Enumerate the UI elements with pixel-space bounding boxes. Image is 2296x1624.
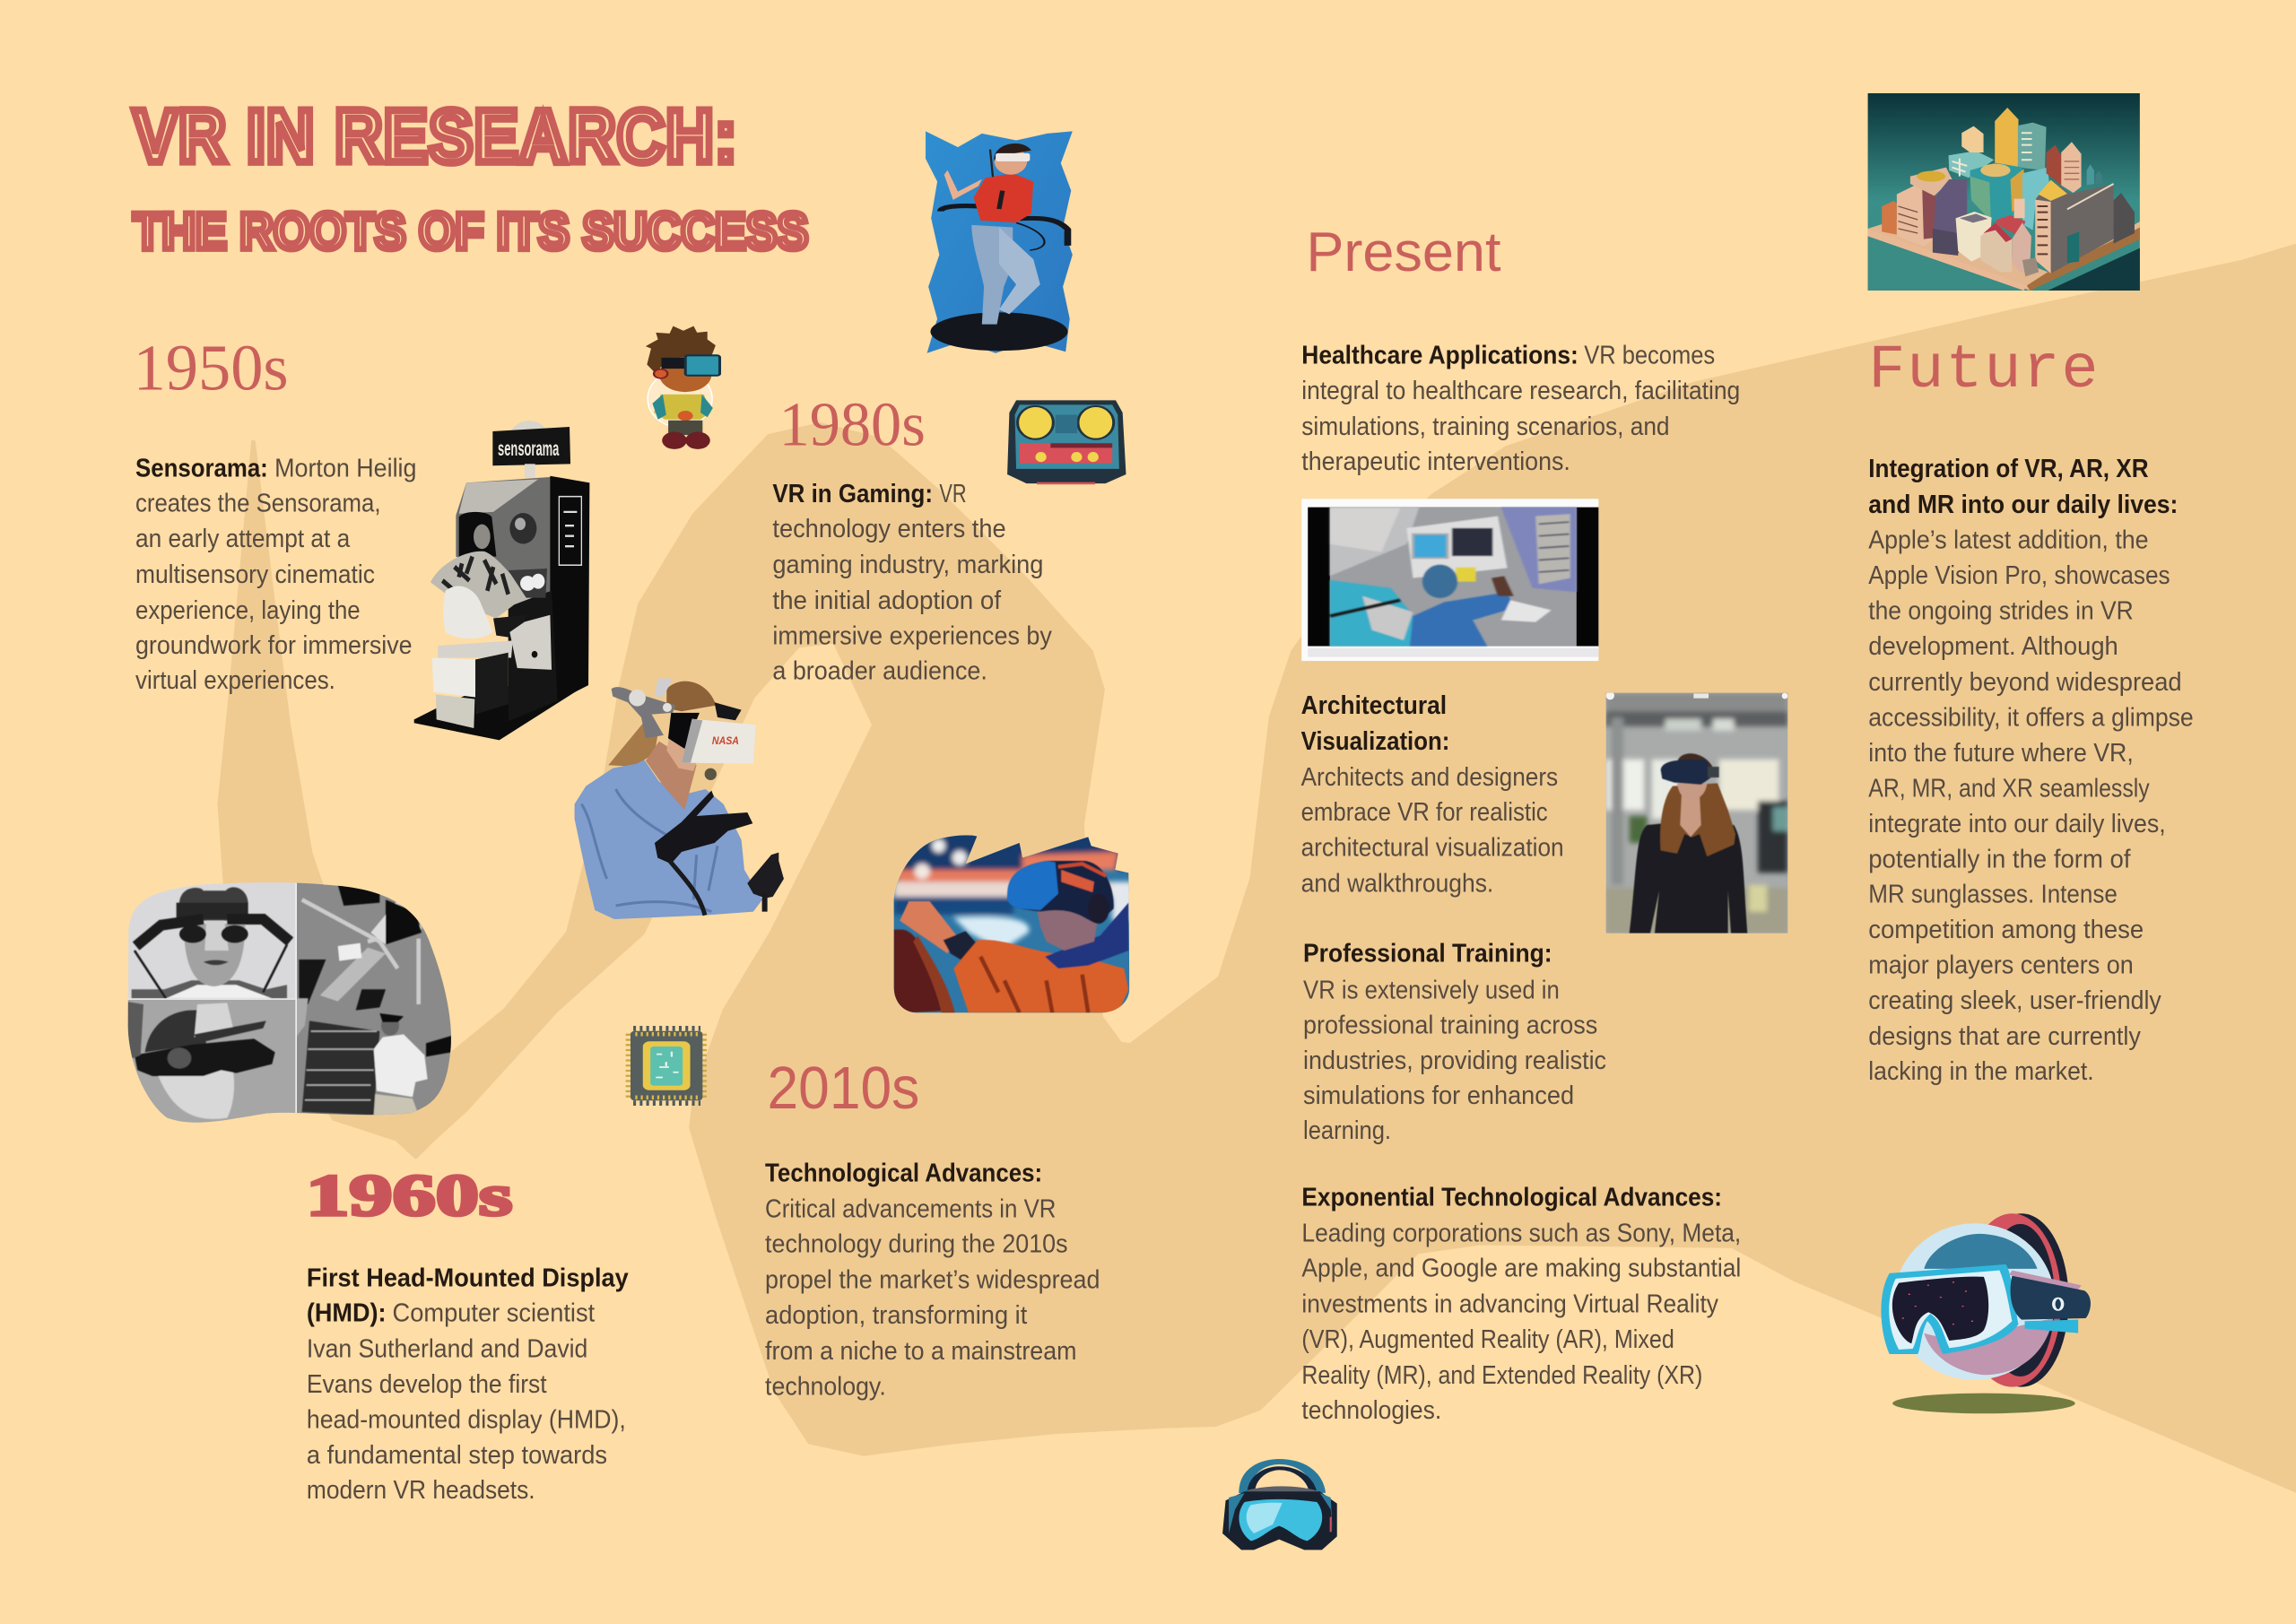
text: first HMD: Ivan Sutherland and David bbox=[307, 1334, 587, 1363]
text: Sensorama: experience, laying the bbox=[135, 596, 361, 625]
text: exponential advances: Reality (MR), and Extended Reality (XR) bbox=[1301, 1361, 1702, 1390]
text: technological advances bbox=[765, 1159, 1100, 1401]
illustration: isometric city bbox=[1868, 93, 2141, 291]
text: future integration: lacking in the market. bbox=[1868, 1057, 2094, 1086]
text: technological advances: technology during the 2010s bbox=[765, 1230, 1068, 1259]
text: technological advances: Critical advancements in VR bbox=[765, 1195, 1056, 1224]
icon: small VR goggles bbox=[1222, 1462, 1337, 1550]
text: first HMD: (HMD): bbox=[307, 1298, 387, 1327]
text: first HMD: First Head-Mounted Display bbox=[307, 1264, 629, 1292]
text: first HMD: Evans develop the first bbox=[307, 1370, 547, 1399]
text: future integration: creating sleek, user-friendly bbox=[1868, 986, 2162, 1015]
text: future integration bbox=[1868, 455, 2194, 1086]
photo: woman in VR headset in office bbox=[1606, 691, 1787, 934]
title: VR IN RESEARCH: bbox=[134, 94, 738, 178]
text: exponential advances: (VR), Augmented Reality (AR), Mixed bbox=[1301, 1325, 1674, 1354]
text: professional training bbox=[1303, 940, 1606, 1145]
text: future integration: into the future where VR, bbox=[1868, 739, 2134, 768]
text: architectural visualization: and walkthroughs. bbox=[1301, 869, 1493, 898]
text: Sensorama: virtual experiences. bbox=[135, 666, 335, 695]
text: exponential advances: investments in advancing Virtual Reality bbox=[1301, 1290, 1719, 1319]
text: future integration: and MR into our daily lives: bbox=[1868, 491, 2178, 519]
text: exponential advances: Exponential Technological Advances: bbox=[1301, 1183, 1722, 1211]
text: VR in Gaming bbox=[772, 480, 1053, 686]
heading: 1960s: 1960s bbox=[306, 1164, 512, 1229]
text: first HMD: Computer scientist bbox=[393, 1298, 595, 1327]
text: future integration: currently beyond widespread bbox=[1868, 668, 2182, 697]
text: professional training: learning. bbox=[1303, 1116, 1391, 1145]
text: future integration: MR sunglasses. Intense bbox=[1868, 881, 2118, 909]
heading: 1950s: 1950s bbox=[134, 331, 289, 404]
text: exponential advances: Leading corporations such as Sony, Meta, bbox=[1301, 1219, 1741, 1247]
icon: retro game console bbox=[1007, 400, 1126, 484]
text: future integration: Integration of VR, AR, XR bbox=[1868, 455, 2149, 483]
text: Sensorama: an early attempt at a bbox=[135, 525, 350, 553]
text: VR in Gaming: technology enters the bbox=[772, 515, 1006, 543]
icon: large VR headset illustration bbox=[1881, 1213, 2091, 1413]
text: future integration: Apple Vision Pro, showcases bbox=[1868, 561, 2170, 590]
text: technological advances: adoption, transforming it bbox=[765, 1301, 1027, 1330]
heading: Present: Present bbox=[1306, 221, 1500, 283]
text: future integration: competition among these bbox=[1868, 916, 2144, 944]
text: healthcare: VR becomes bbox=[1584, 342, 1715, 370]
text: healthcare: therapeutic interventions. bbox=[1301, 447, 1570, 476]
photo: woman in NASA headset bbox=[575, 679, 784, 919]
photo: racer in VR headset bbox=[891, 831, 1133, 1016]
title bbox=[134, 94, 808, 261]
text: future integration: major players centers on bbox=[1868, 951, 2134, 980]
text: healthcare: integral to healthcare research, facilitating bbox=[1301, 377, 1740, 405]
text: Sensorama: groundwork for immersive bbox=[135, 631, 413, 660]
text: first HMD: a fundamental step towards bbox=[307, 1441, 607, 1470]
text: VR in Gaming: gaming industry, marking bbox=[772, 551, 1043, 579]
text: first HMD: modern VR headsets. bbox=[307, 1476, 535, 1505]
text: professional training: professional training across bbox=[1303, 1012, 1597, 1040]
text: professional training: industries, providing realistic bbox=[1303, 1046, 1606, 1075]
background VR brush shape bbox=[220, 246, 2296, 1490]
text: future integration: integrate into our daily lives, bbox=[1868, 810, 2166, 838]
text: architectural visualization: Architectural bbox=[1301, 691, 1447, 720]
text: VR in Gaming: the initial adoption of bbox=[772, 586, 1001, 615]
text: VR in Gaming: VR bbox=[939, 480, 967, 508]
text: healthcare bbox=[1301, 342, 1740, 476]
icon: microchip bbox=[629, 1029, 704, 1103]
text: Sensorama: Morton Heilig bbox=[274, 454, 416, 482]
text: first HMD: head-mounted display (HMD), bbox=[307, 1406, 626, 1435]
photo: person on VR pod with red shirt bbox=[926, 131, 1073, 353]
heading: 1980s: 1980s bbox=[779, 389, 926, 459]
text: future integration: potentially in the form of bbox=[1868, 845, 2131, 873]
photo: Sensorama machine bbox=[414, 421, 589, 740]
text: future integration: Apple’s latest addition, the bbox=[1868, 525, 2149, 554]
text: VR in Gaming: VR in Gaming: bbox=[772, 480, 933, 508]
photo: Sutherland head-mounted display collage bbox=[126, 879, 455, 1128]
text: Sensorama: Sensorama: bbox=[135, 454, 268, 482]
icon: cartoon kid with VR visor bbox=[646, 326, 719, 449]
text: technological advances: from a niche to a mainstream bbox=[765, 1337, 1076, 1366]
text: Sensorama bbox=[135, 454, 416, 695]
text: professional training: Professional Training: bbox=[1303, 940, 1552, 968]
text: architectural visualization: Visualization: bbox=[1301, 727, 1449, 756]
text: VR in Gaming: a broader audience. bbox=[772, 657, 987, 686]
text: first HMD bbox=[307, 1264, 629, 1505]
text: future integration: the ongoing strides in VR bbox=[1868, 597, 2134, 626]
text: architectural visualization: architectural visualization bbox=[1301, 833, 1564, 862]
text: technological advances: Technological Advances: bbox=[765, 1159, 1042, 1188]
text: exponential advances: technologies. bbox=[1301, 1396, 1441, 1425]
heading: 2010s: 2010s bbox=[768, 1055, 919, 1122]
text: professional training: VR is extensively used in bbox=[1303, 976, 1560, 1004]
text: future integration: AR, MR, and XR seamlessly bbox=[1868, 774, 2150, 803]
text: VR in Gaming: immersive experiences by bbox=[772, 621, 1053, 650]
text: architectural visualization: Architects and designers bbox=[1301, 763, 1558, 792]
photo: medical VR simulation screenshot bbox=[1301, 499, 1598, 661]
title: THE ROOTS OF ITS SUCCESS bbox=[134, 204, 808, 261]
photo: Sensorama machine: sensorama bbox=[498, 437, 560, 460]
text: exponential advances: Apple, and Google are making substantial bbox=[1301, 1255, 1741, 1283]
text: exponential advances bbox=[1301, 1183, 1741, 1425]
text: technological advances: propel the market’s widespread bbox=[765, 1266, 1100, 1295]
text: healthcare: simulations, training scenarios, and bbox=[1301, 413, 1670, 441]
photo: woman in NASA headset: NASA bbox=[712, 734, 739, 747]
text: Sensorama: creates the Sensorama, bbox=[135, 490, 380, 518]
text: Sensorama: multisensory cinematic bbox=[135, 560, 375, 589]
text: technological advances: technology. bbox=[765, 1372, 886, 1401]
text: healthcare: Healthcare Applications: bbox=[1301, 342, 1578, 370]
text: architectural visualization: embrace VR for realistic bbox=[1301, 798, 1548, 827]
text: professional training: simulations for enhanced bbox=[1303, 1081, 1574, 1110]
text: future integration: designs that are currently bbox=[1868, 1022, 2142, 1051]
text: future integration: accessibility, it offers a glimpse bbox=[1868, 703, 2194, 732]
text: architectural visualization bbox=[1301, 691, 1564, 898]
heading: Future: Future bbox=[1868, 335, 2099, 405]
text: future integration: development. Although bbox=[1868, 632, 2118, 661]
